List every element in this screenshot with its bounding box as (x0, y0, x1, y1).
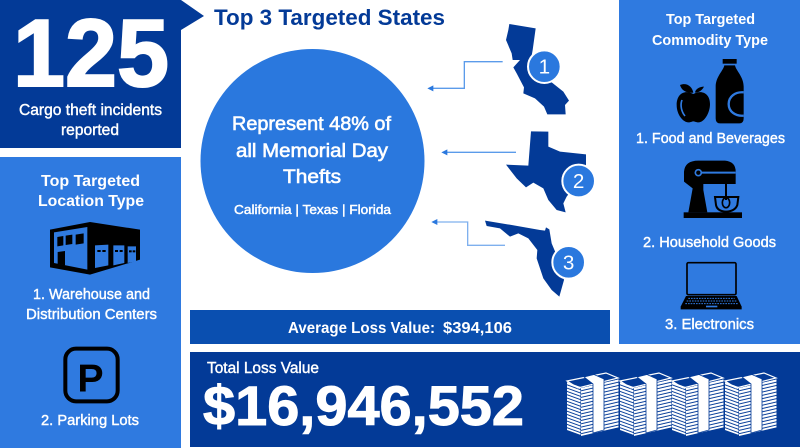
arrow: Texas (441, 149, 516, 155)
bar: average loss value: $394,106 (443, 320, 512, 337)
label: household goods: 2. Household Goods (643, 235, 776, 251)
total loss amount: $16,946,552 (203, 374, 524, 437)
label: warehouse (26, 287, 157, 323)
arrow: Florida (431, 219, 505, 245)
icon: laptop (681, 263, 742, 309)
panel: incidents count (0, 0, 204, 148)
icon: Texas (506, 131, 595, 212)
state names: California | Texas | Florida (234, 202, 392, 217)
label: food and beverages: 1. Food and Beverages (636, 131, 785, 147)
circle statement (232, 113, 392, 188)
label: warehouse: 1. Warehouse and (33, 287, 150, 303)
total loss label: Total Loss Value (207, 360, 319, 377)
heading: commodity type: Commodity Type (652, 32, 768, 49)
incidents caption (19, 102, 162, 139)
label: electronics: 3. Electronics (665, 317, 754, 333)
circle statement: all Memorial Day (236, 140, 388, 162)
circle statement: Thefts (283, 166, 341, 188)
map group: states (427, 24, 595, 297)
icon: parking: P (77, 357, 104, 401)
big number 125: 125 (13, 0, 169, 107)
circle statement: Represent 48% of (232, 113, 392, 135)
icon: Florida (485, 221, 585, 297)
label: parking lots: 2. Parking Lots (41, 413, 139, 429)
label: warehouse: Distribution Centers (26, 307, 157, 323)
panel: location type (0, 157, 181, 448)
heading: location type (38, 173, 144, 210)
heading: commodity type (652, 11, 768, 49)
panel: states circle (200, 49, 424, 273)
icon: money stacks (567, 373, 776, 436)
bar: average loss value: Average Loss Value: (288, 320, 435, 337)
bar: average loss value (190, 310, 610, 344)
heading: location type: Location Type (38, 193, 144, 210)
icon: Florida: 3 (563, 251, 574, 274)
icon: Texas: 2 (573, 170, 584, 193)
heading: commodity type: Top Targeted (666, 11, 755, 28)
incidents caption: Cargo theft incidents (19, 102, 162, 119)
heading: top 3 targeted states: Top 3 Targeted States (214, 5, 445, 30)
incidents caption: reported (61, 122, 119, 139)
arrow: California (427, 62, 503, 91)
panel: total loss value (190, 352, 800, 447)
panel: commodity type (619, 0, 800, 344)
icon: stand mixer (684, 161, 742, 218)
icon: warehouse (50, 222, 140, 275)
icon: California: 1 (539, 56, 550, 79)
icon: parking (65, 349, 118, 401)
heading: location type: Top Targeted (41, 173, 140, 190)
icon: California (506, 24, 569, 114)
icon: food and beverages (677, 59, 744, 123)
